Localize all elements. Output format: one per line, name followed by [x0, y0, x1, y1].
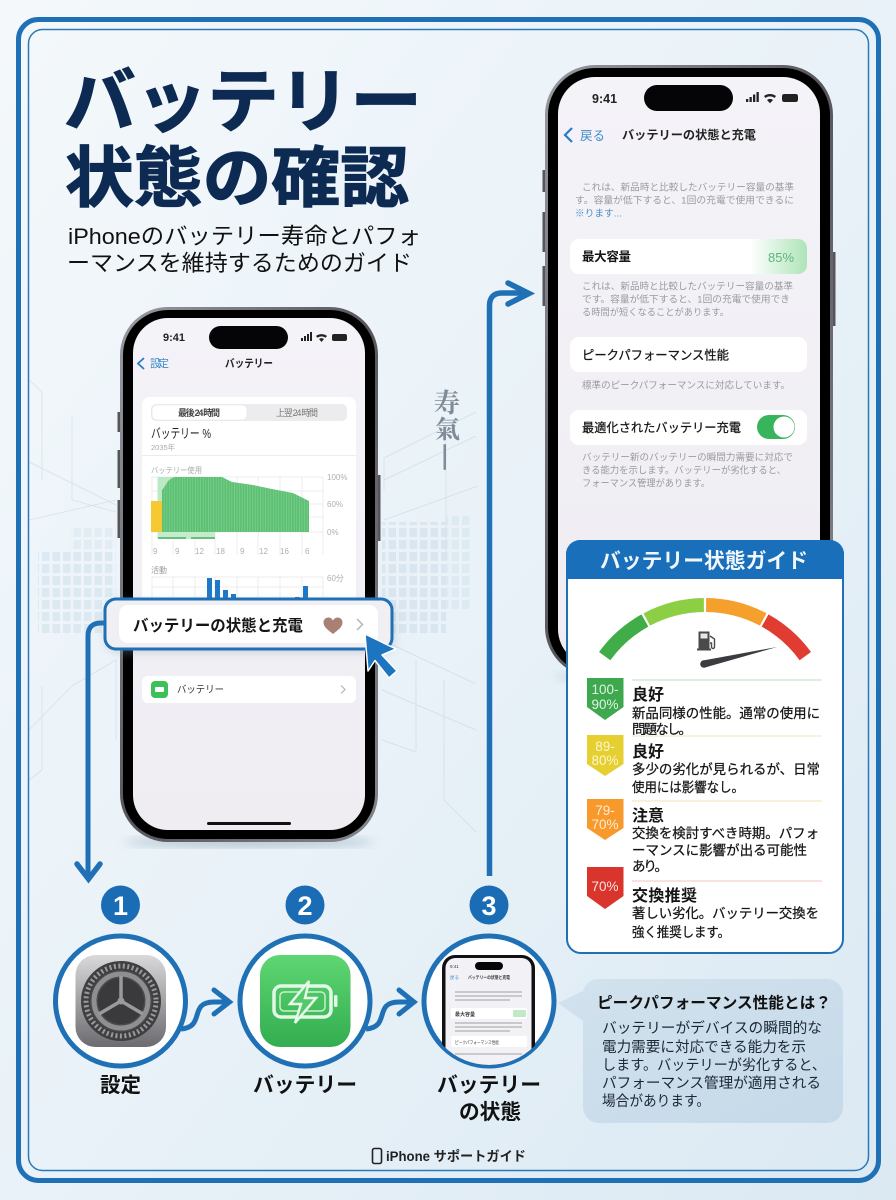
label: [437, 1074, 541, 1124]
nav bar: [565, 127, 756, 143]
row: peak performance: ピークパフォーマンス性能: [582, 348, 729, 362]
row: optimized charging: [570, 410, 807, 445]
charging description: バッテリー新のバッテリーの瞬間力需要に対応で: [582, 452, 793, 464]
row 70: 70%: [591, 879, 619, 894]
row 100-90: 問題なし。: [632, 722, 692, 737]
intro text: [575, 182, 794, 220]
label: 設定: [100, 1074, 141, 1097]
capacity description: る時間が短くなることがあります。: [582, 306, 729, 318]
callout: what is peak performance: バッテリーがデバイスの瞬間的な: [602, 1019, 822, 1037]
battery level chart: 12: [195, 547, 204, 556]
icon: chevron: [357, 619, 362, 630]
guide header: [566, 540, 844, 579]
row 100-90: 良好: [632, 685, 664, 704]
icon: battery app: [260, 955, 350, 1047]
circle 3: [424, 936, 554, 1066]
intro text: す。容量が低下すると、1回の充電で使用できるに: [575, 194, 794, 206]
panel: battery health guide: [566, 540, 844, 953]
battery level chart: 16: [280, 547, 289, 556]
number badge 2: 2: [297, 891, 313, 921]
row 100-90: 新品同様の性能。通常の使用に: [632, 705, 820, 721]
home indicator: [207, 822, 291, 825]
row 70: [587, 867, 822, 940]
callout: what is peak performance: [558, 979, 843, 1123]
charging description: フォーマンス管理があります。: [582, 478, 710, 490]
row: maximum capacity: [570, 239, 807, 274]
circle 2: [240, 936, 370, 1066]
label: の状態: [459, 1101, 521, 1124]
arrow: step 3 up to detail phone: [490, 283, 529, 876]
mini phone screenshot: バッテリーの状態と充電: [468, 974, 510, 981]
number badge 1: 1: [113, 891, 128, 921]
phone: battery health screen: [542, 65, 836, 682]
row 89-80: 使用には影響なし。: [632, 779, 744, 795]
row 79-70: あり。: [632, 859, 668, 874]
row: maximum capacity: 最大容量: [582, 249, 631, 264]
battery level chart: [151, 473, 347, 556]
guide header: バッテリー状態ガイド: [600, 550, 808, 573]
arrow: popup to step 1: [77, 623, 106, 879]
label: バッテリー: [253, 1074, 357, 1097]
nav bar: 戻る: [580, 129, 605, 143]
icon: heart: [324, 617, 342, 634]
callout: what is peak performance: 場合があります。: [602, 1093, 710, 1110]
charging description: きる能力を示します。バッテリーが劣化すると、: [582, 464, 786, 476]
subtitle: iPhoneのバッテリー寿命とパフォ: [68, 224, 421, 249]
decorative calligraphy: 氣: [435, 410, 460, 446]
activity chart: [152, 577, 323, 600]
step 2 battery: [240, 886, 370, 1097]
capacity description: [582, 280, 793, 318]
decorative calligraphy: [434, 383, 460, 470]
icon: phone: [372, 1148, 382, 1164]
intro text: これは、新品時と比較したバッテリー容量の基準: [582, 182, 794, 194]
row 89-80: 多少の劣化が見られるが、日常: [632, 762, 820, 777]
row 79-70: 79-: [595, 803, 615, 818]
step 3 battery health: [424, 886, 554, 1124]
icon: fuel pump: [697, 632, 714, 650]
row 100-90: 100-: [591, 682, 619, 697]
gauge: [605, 605, 805, 668]
row: maximum capacity: 85%: [768, 250, 794, 265]
intro text: ※ります...: [575, 208, 622, 220]
battery level chart: 12: [259, 547, 268, 556]
battery level chart: 18: [216, 547, 225, 556]
battery card: 60分: [327, 574, 344, 583]
arrow: step 1 to 2: [181, 990, 230, 1029]
toggle: [757, 415, 795, 439]
row: peak performance: [570, 337, 807, 372]
mini phone screenshot: [442, 955, 535, 1065]
row 79-70: 交換を検討すべき時期。パフォ: [632, 826, 819, 841]
battery card: 上翌 24 時間: [276, 408, 318, 418]
callout: what is peak performance: します。バッテリーが劣化すると、: [602, 1057, 826, 1074]
status bar: [163, 332, 347, 344]
label: バッテリー: [437, 1074, 541, 1097]
status bar: 9:41: [592, 92, 617, 106]
battery level chart: 9: [153, 547, 158, 556]
callout: what is peak performance: 電力需要に対応できる能力を示: [602, 1039, 806, 1056]
row 89-80: [587, 735, 822, 795]
decorative calligraphy: 寿: [434, 383, 460, 420]
number badge 3: 3: [481, 891, 497, 921]
dynamic island: [209, 326, 288, 349]
mini phone screenshot: 戻る: [450, 975, 459, 981]
status bar: 9:41: [163, 332, 185, 344]
charging description: [582, 452, 793, 490]
row 70: 強く推奨します。: [632, 925, 730, 940]
number badge 2: [286, 886, 324, 924]
nav bar: バッテリーの状態と充電: [622, 127, 756, 142]
row 79-70: 70%: [591, 817, 619, 832]
title: [64, 63, 422, 215]
battery card: 活動: [151, 565, 167, 575]
circle 1: [56, 936, 186, 1066]
decorative tech pattern left: [29, 380, 116, 780]
callout: what is peak performance: パフォーマンス管理が適用される: [602, 1074, 821, 1092]
peak description: 標準のピークパフォーマンスに対応しています。: [582, 380, 790, 392]
decorative tech pattern right: [382, 412, 478, 832]
icon: settings gear: [76, 955, 166, 1047]
battery level chart: 9: [240, 547, 245, 556]
battery list row: バッテリー: [177, 684, 224, 696]
nav bar: バッテリー: [225, 357, 273, 370]
needle: [700, 647, 777, 668]
dynamic island: [644, 85, 733, 111]
battery level chart: 60%: [327, 500, 343, 509]
mini phone screenshot: ピークパフォーマンス性能: [455, 1039, 499, 1046]
battery level chart: 100%: [327, 473, 347, 482]
phone: battery screen: [118, 307, 380, 847]
footer: iPhone サポートガイド: [386, 1149, 526, 1164]
row 100-90: 90%: [591, 697, 619, 712]
subtitle: [67, 224, 421, 276]
icon: cursor: [365, 634, 397, 678]
mini phone screenshot: 9:41: [450, 964, 459, 969]
arrow: step 2 to 3: [366, 990, 414, 1029]
title: バッテリー: [64, 63, 422, 141]
status bar: [592, 92, 798, 106]
row 89-80: 80%: [591, 753, 619, 768]
subtitle: ーマンスを維持するためのガイド: [67, 251, 412, 276]
battery card: [142, 397, 356, 600]
battery card: バッテリー %: [151, 426, 211, 441]
nav bar: 設定: [150, 357, 169, 370]
title: 状態の確認: [65, 141, 409, 215]
callout: what is peak performance: ピークパフォーマンス性能とは？: [597, 993, 831, 1012]
battery list row: [142, 676, 356, 703]
battery level chart: 9: [175, 547, 180, 556]
row 100-90: [587, 678, 822, 737]
row 79-70: ーマンスに影響が出る可能性: [632, 843, 807, 858]
battery level chart: 0%: [327, 528, 339, 537]
callout: battery health and charging row: バッテリーの状態と充電: [133, 616, 303, 635]
battery card: 2035年: [151, 442, 176, 452]
nav bar: [138, 357, 273, 370]
capacity description: です。容量が低下すると、1回の充電で使用でき: [582, 294, 790, 306]
row 79-70: [587, 799, 822, 874]
row 79-70: 注意: [632, 807, 664, 825]
battery level chart: 6: [305, 547, 310, 556]
battery card: 最後 24 時間: [178, 407, 220, 418]
row 89-80: 良好: [632, 742, 664, 761]
row 89-80: 89-: [595, 739, 615, 754]
capacity description: これは、新品時と比較したバッテリー容量の基準: [582, 280, 793, 292]
row: optimized charging: 最適化されたバッテリー充電: [582, 421, 741, 435]
battery card: バッテリー使用: [151, 465, 202, 475]
number badge 3: [470, 886, 508, 924]
row 70: 交換推奨: [632, 887, 697, 905]
row 70: 著しい劣化。バッテリー交換を: [632, 906, 819, 921]
callout: battery health and charging row: [105, 599, 394, 652]
mini phone screenshot: 最大容量: [455, 1011, 475, 1018]
number badge 1: [101, 886, 140, 924]
step 1 settings: [56, 886, 186, 1097]
